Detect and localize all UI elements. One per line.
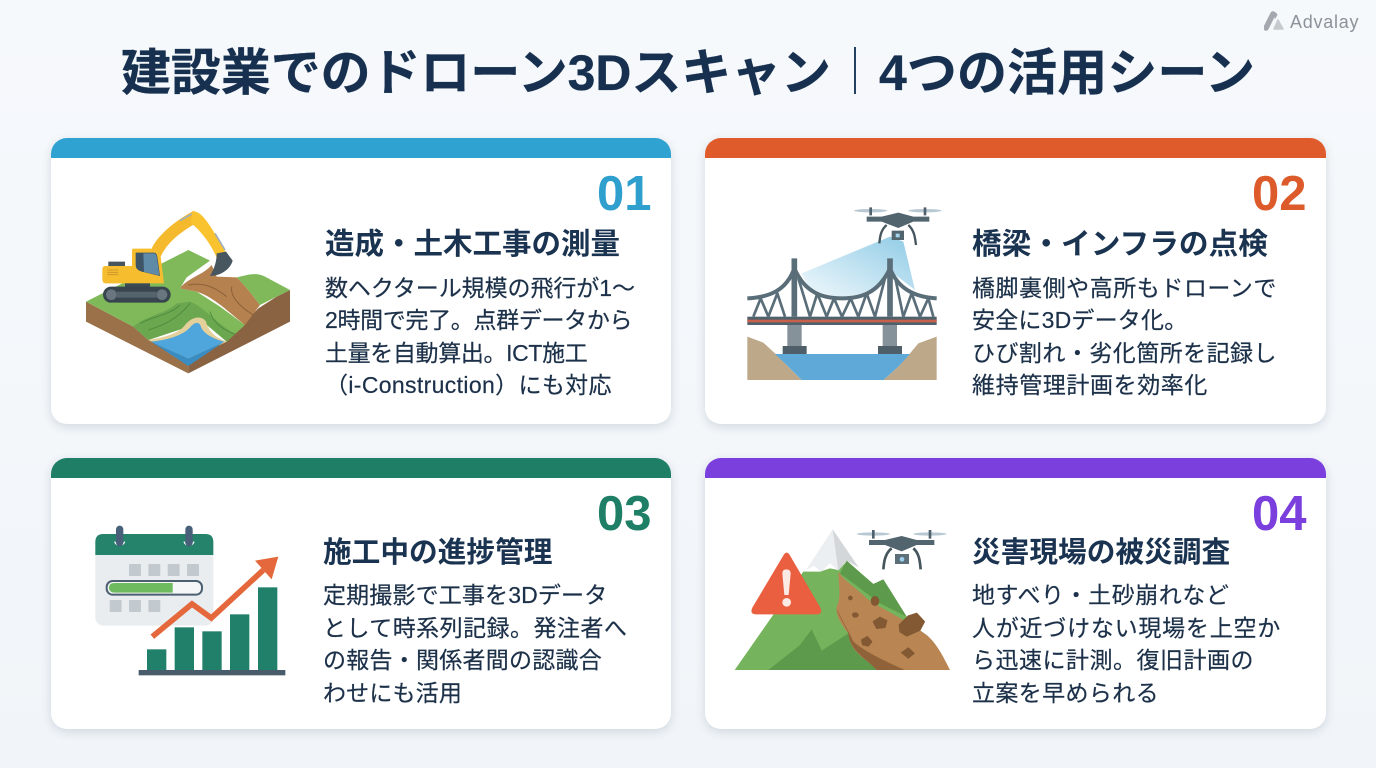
number 02: 02: [1252, 167, 1307, 221]
body text: 安全に3Dデータ化。: [972, 307, 1187, 333]
panel: 04 災害現場の被災調査: [705, 458, 1326, 729]
logo: Advalay: [1264, 11, 1359, 32]
body text: 2時間で完了。点群データから: [325, 307, 632, 333]
title: 4つの活用シーン: [879, 45, 1255, 101]
body text: ら迅速に計測。復旧計画の: [972, 647, 1254, 673]
heading: 災害現場の被災調査: [972, 537, 1230, 569]
icon: excavator on terrain: [86, 210, 290, 374]
number 04: 04: [1252, 487, 1307, 541]
title: 建設業でのドローン3Dスキャン: [121, 45, 831, 101]
body text: の報告・関係者間の認識合: [323, 647, 602, 673]
body text: 人が近づけない現場を上空か: [972, 615, 1281, 641]
number 03: 03: [597, 487, 652, 541]
heading: 造成・土木工事の測量: [325, 228, 620, 261]
body text: わせにも活用: [323, 680, 462, 706]
number 01: 01: [597, 167, 652, 221]
panel: 02 橋梁・インフラの点検: [705, 138, 1326, 424]
icon: bridge and drone: [747, 207, 942, 380]
body text: 定期撮影で工事を3Dデータ: [323, 582, 607, 608]
body text: [972, 582, 1281, 706]
logo: Advalay: Advalay: [1290, 12, 1359, 32]
body text: [972, 274, 1277, 398]
body text: [323, 582, 627, 706]
body text: 立案を早められる: [972, 680, 1159, 706]
body text: 土量を自動算出。ICT施工: [325, 340, 587, 366]
panel: 03 施工中の進捗管理: [51, 458, 671, 729]
body text: ひび割れ・劣化箇所を記録し: [972, 340, 1277, 366]
body text: （i-Construction）にも対応: [325, 372, 612, 398]
heading: 施工中の進捗管理: [323, 537, 552, 569]
heading: 橋梁・インフラの点検: [972, 228, 1268, 261]
icon: calendar and growth chart: [95, 526, 286, 676]
body text: 地すべり・土砂崩れなど: [972, 582, 1229, 608]
panel: 01 造成・土木工事の測量: [51, 138, 671, 424]
body text: 橋脚裏側や高所もドローンで: [972, 274, 1277, 300]
icon: landslide, warning and drone: [734, 530, 950, 670]
body text: 維持管理計画を効率化: [972, 372, 1208, 398]
body text: [325, 274, 635, 398]
body text: 数ヘクタール規模の飛行が1〜: [325, 274, 635, 300]
body text: として時系列記録。発注者へ: [323, 615, 627, 641]
title: [121, 45, 1255, 101]
